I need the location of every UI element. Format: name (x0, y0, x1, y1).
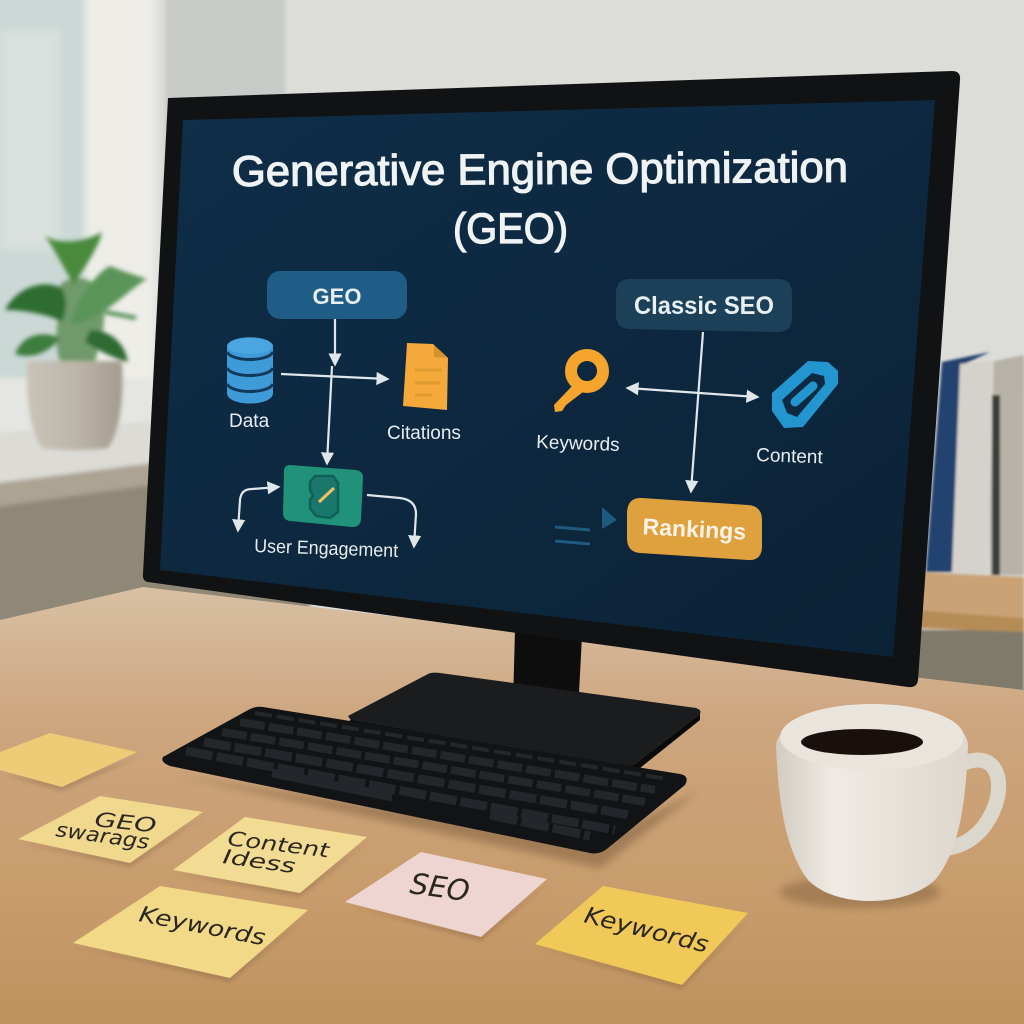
mug rim (780, 704, 964, 770)
sticky note: Keywords left: Keywords (137, 902, 267, 951)
Rankings label box (627, 498, 762, 560)
icon: citations document (403, 343, 448, 410)
sticky note shadows (0, 756, 751, 989)
sticky note: Content Idess: Idess (221, 844, 297, 878)
desk surface (0, 587, 1024, 1024)
sticky note: GEO swarags (18, 796, 203, 863)
label: Content: Content (756, 445, 824, 468)
label: Data: Data (229, 411, 270, 432)
background: window (0, 0, 155, 385)
icon: potted plant (5, 232, 147, 450)
Rankings label box: Rankings (642, 513, 747, 545)
sticky note: SEO pink (345, 852, 547, 937)
label: Citations: Citations (387, 423, 461, 444)
coffee mug (776, 704, 999, 908)
beige cover (990, 355, 1024, 575)
panel: Classic SEO diagram (536, 279, 838, 560)
title: Generative Engine Optimization (232, 144, 848, 196)
title: (GEO) (453, 205, 568, 253)
GEO label box (267, 271, 407, 319)
icon: key (554, 355, 603, 412)
pot (27, 361, 122, 450)
Classic SEO label box (616, 279, 792, 332)
keyboard (162, 707, 700, 868)
SEO arrows (628, 332, 757, 491)
books on the shelf (900, 352, 1024, 700)
title (232, 144, 848, 253)
Classic SEO label box: Classic SEO (634, 292, 774, 320)
mug body (776, 709, 968, 901)
sticky note: GEO swarags: GEO (93, 807, 158, 837)
GEO arrows (238, 319, 416, 546)
monitor bezel (143, 71, 960, 687)
white book (952, 360, 994, 575)
sticky note: GEO swarags: swarags (54, 817, 151, 854)
label: User Engagement: User Engagement (254, 536, 399, 562)
sticky note: SEO pink: SEO (408, 866, 472, 908)
GEO label box: GEO (313, 284, 361, 309)
blue book (926, 352, 990, 572)
shelf (915, 572, 1024, 618)
sticky note: Content Idess (173, 817, 367, 893)
stand base (348, 673, 700, 767)
icon: paperclip content (772, 361, 838, 428)
sticky note: Keywords left (73, 886, 308, 978)
grey book (1000, 392, 1021, 575)
background: room wall (0, 0, 1024, 710)
dark gap (992, 395, 1001, 575)
coffee (801, 729, 923, 755)
sticky note: Content Idess: Content (226, 826, 332, 863)
monitor screen (160, 100, 935, 657)
mug handle (935, 760, 999, 848)
icon: user engagement (283, 465, 363, 527)
label: Keywords: Keywords (536, 432, 620, 456)
stand neck (513, 630, 582, 712)
panel: GEO diagram (227, 271, 461, 562)
sticky note: blank yellow (0, 733, 137, 787)
background: window sill (0, 378, 160, 508)
mug shadow (780, 876, 940, 908)
icon: database (227, 337, 273, 404)
monitor stand (348, 630, 700, 772)
wall behind shelf (900, 630, 1024, 700)
sticky note: Keywords right: Keywords (582, 903, 711, 959)
keyboard keys (186, 713, 668, 836)
plant leaves (5, 232, 147, 362)
sticky note: Keywords right (535, 886, 748, 985)
icon: faded list (555, 507, 617, 544)
